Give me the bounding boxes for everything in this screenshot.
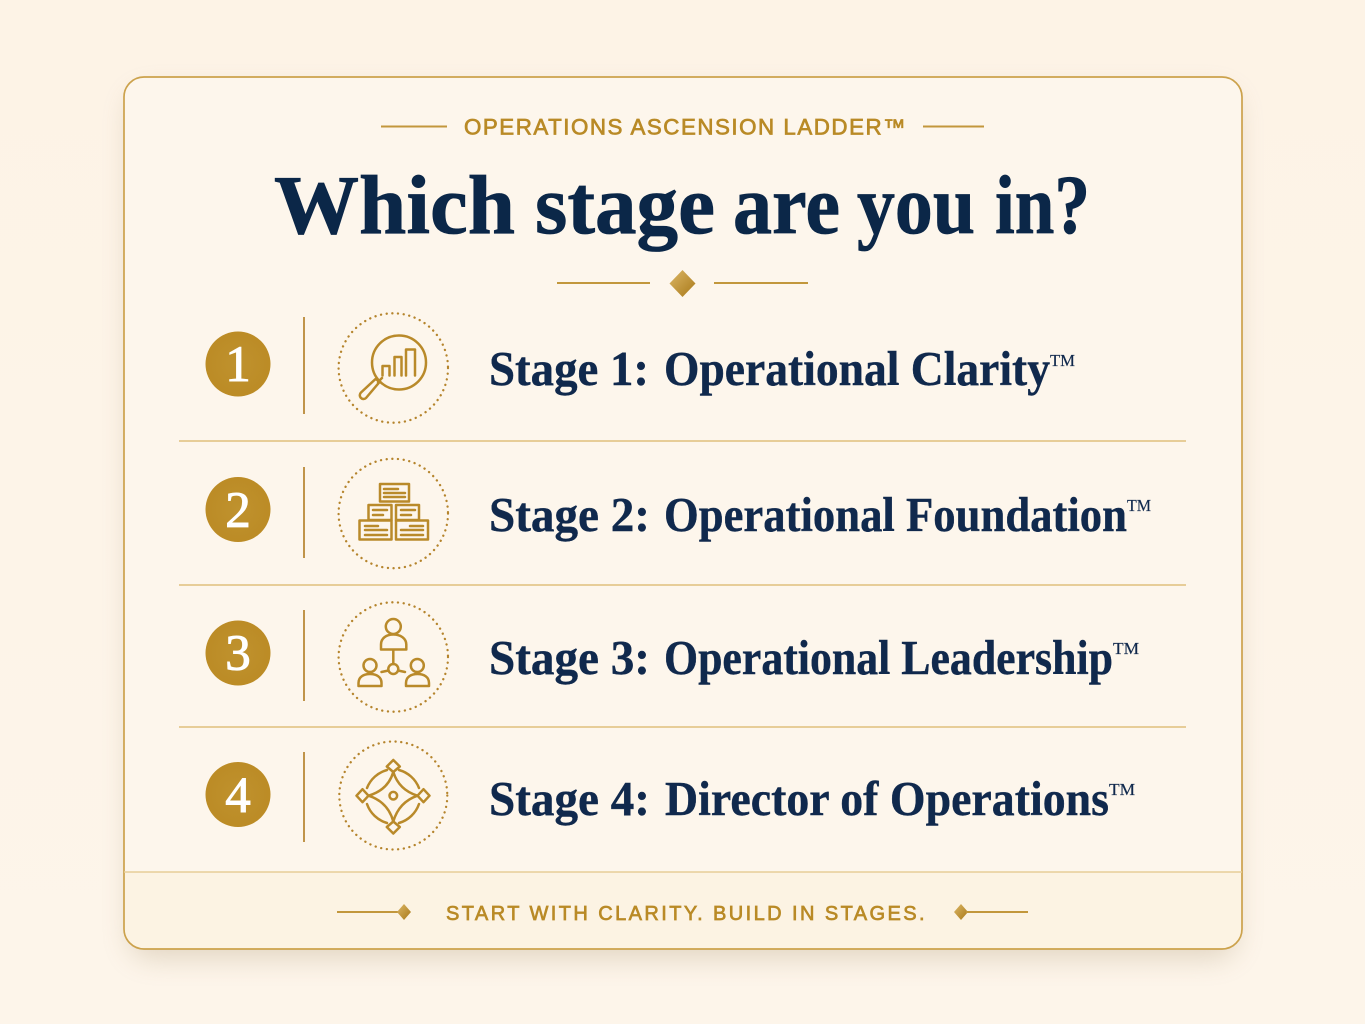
- stage 3 label: TM: [1113, 639, 1139, 658]
- title: [274, 159, 1090, 252]
- stage 2 label: TM: [1127, 496, 1151, 515]
- icon: compass star: [339, 742, 447, 850]
- infographic: operations ascension ladder: [117, 76, 1249, 968]
- icon: team network: [339, 602, 448, 712]
- stage row 3: [206, 602, 1139, 712]
- number badge 2: [206, 477, 270, 542]
- stage row 1: [206, 313, 1075, 423]
- number badge 2: 2: [225, 483, 251, 539]
- stage 4 label: Stage 4:: [489, 771, 650, 826]
- footer tagline: [337, 903, 1028, 925]
- stage 1 label: TM: [1050, 351, 1075, 370]
- stage row 2: [206, 459, 1151, 568]
- stage 1 label: Stage 1:: [489, 341, 649, 396]
- number badge 3: 3: [225, 626, 251, 682]
- stage 2 label: Operational Foundation: [664, 487, 1127, 542]
- stage row 4: [206, 742, 1135, 850]
- title: Which: [274, 159, 515, 252]
- stage 3 label: Stage 3:: [489, 630, 650, 685]
- number badge 1: [206, 332, 270, 396]
- panel: footer band: [124, 872, 1242, 949]
- stage 4 label: TM: [1109, 780, 1135, 799]
- eyebrow heading: OPERATIONS ASCENSION LADDER™: [464, 114, 907, 140]
- footer tagline: START WITH CLARITY. BUILD IN STAGES.: [446, 903, 927, 925]
- number badge 1: 1: [225, 337, 251, 393]
- stage 1 label: Operational Clarity: [664, 341, 1050, 396]
- stage 1 label: [489, 341, 1075, 396]
- icon: stacked building blocks: [339, 459, 448, 568]
- title ornament: [557, 270, 808, 297]
- icon: magnifier over bar chart: [339, 313, 448, 423]
- panel: main card: [124, 77, 1242, 949]
- stage 4 label: Director of Operations: [665, 771, 1109, 826]
- title: in?: [995, 159, 1090, 252]
- number badge 3: [206, 620, 270, 686]
- number badge 4: [206, 762, 270, 827]
- stage 3 label: Operational Leadership: [664, 630, 1113, 685]
- stage 2 label: Stage 2:: [489, 487, 650, 542]
- title: stage: [535, 159, 715, 252]
- title: you: [857, 159, 975, 252]
- number badge 4: 4: [225, 768, 251, 824]
- title: are: [733, 159, 840, 252]
